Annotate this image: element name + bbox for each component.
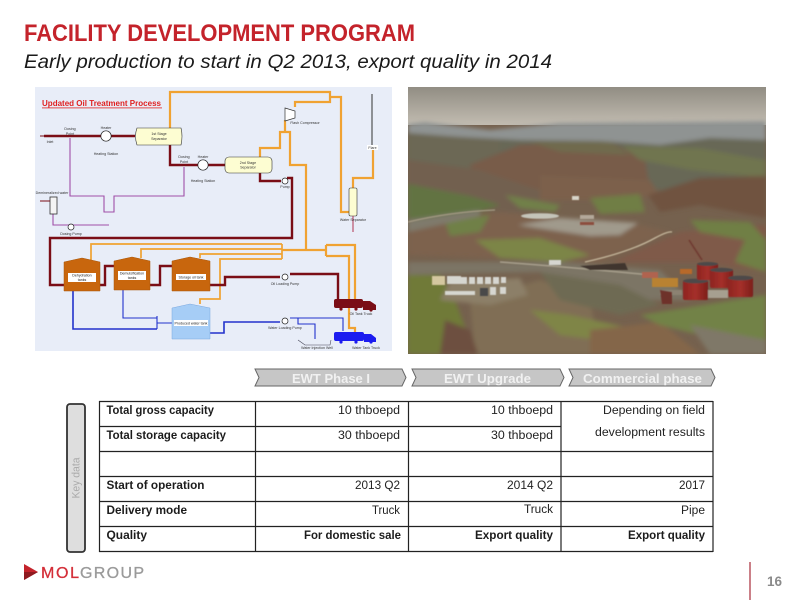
panel: site photograph bbox=[408, 87, 766, 354]
logo: MOL Group: GROUP bbox=[80, 565, 144, 582]
diagram labels: Inlet bbox=[47, 140, 53, 144]
diagram labels: Separator bbox=[240, 166, 257, 170]
gas pipework bbox=[91, 92, 373, 333]
diagram labels: 1st Stage bbox=[151, 132, 167, 136]
diagram labels: Heater bbox=[198, 155, 209, 159]
row: start of operation: 2013 Q2 bbox=[355, 480, 400, 492]
diagram labels: Dosing Pump bbox=[60, 232, 82, 236]
diagram labels: Separator bbox=[151, 137, 168, 141]
row: delivery mode bbox=[106, 504, 705, 517]
storage tanks: Dehydration bbox=[72, 274, 92, 278]
diagram labels: Heating Station bbox=[191, 179, 215, 183]
diagram labels: Flare bbox=[368, 146, 377, 150]
row: total storage capacity: Total storage capacity bbox=[106, 430, 227, 442]
phase chevron: EWT Phase I: EWT Phase I bbox=[292, 371, 370, 386]
row: quality: Export quality bbox=[475, 530, 554, 542]
diagram labels: Demineralized water bbox=[36, 191, 69, 195]
title: FACILITY DEVELOPMENT PROGRAM bbox=[24, 20, 415, 47]
diagram labels: Point bbox=[66, 132, 74, 136]
diagram labels: Point bbox=[180, 160, 188, 164]
logo: MOL Group bbox=[24, 564, 144, 582]
oil tank truck bbox=[334, 299, 376, 312]
diagram labels: Water Tank Truck bbox=[352, 346, 380, 350]
diagram labels bbox=[36, 121, 380, 350]
diagram labels: Flash Compressor bbox=[290, 121, 320, 125]
chemical dosing lines bbox=[53, 138, 184, 225]
storage tanks: Produced water tank bbox=[175, 322, 208, 326]
key data side label bbox=[67, 404, 85, 552]
page number divider and number bbox=[749, 562, 782, 600]
phase chevron: Commercial phase: Commercial phase bbox=[583, 371, 702, 386]
row: total gross capacity: Depending on field bbox=[603, 405, 705, 417]
separators and column bbox=[40, 128, 357, 232]
row: delivery mode: Pipe bbox=[681, 505, 705, 517]
phase chevron: Commercial phase bbox=[569, 369, 715, 386]
row: start of operation: Start of operation bbox=[106, 480, 204, 492]
row: total gross capacity: 10 thboepd bbox=[338, 405, 400, 417]
table grid bbox=[99, 401, 713, 552]
subtitle: Early production to start in Q2 2013, export quality in 2014 bbox=[24, 52, 552, 73]
row: delivery mode: Truck bbox=[524, 504, 553, 516]
storage tanks: tanks bbox=[78, 278, 86, 282]
row: start of operation bbox=[106, 480, 705, 492]
water pipework bbox=[73, 290, 343, 345]
diagram labels: Oil Tank Truck bbox=[350, 312, 373, 316]
row: quality bbox=[106, 530, 706, 542]
row: delivery mode: Delivery mode bbox=[106, 505, 187, 517]
water tank truck bbox=[334, 332, 376, 344]
panel: oil treatment process diagram bbox=[35, 87, 392, 351]
heaters, pumps and compressor bbox=[40, 108, 295, 324]
diagram labels: Dosing bbox=[64, 127, 76, 131]
diagram labels: Pump bbox=[280, 185, 290, 189]
storage tanks: Demulsification bbox=[120, 272, 144, 276]
row: delivery mode: Truck bbox=[372, 505, 400, 517]
row: quality: Export quality bbox=[628, 530, 706, 542]
row: total gross capacity: Total gross capacity bbox=[106, 405, 215, 417]
diagram labels: Water Injection Well bbox=[301, 346, 333, 350]
diagram labels: Dosing bbox=[178, 155, 190, 159]
storage tanks: Storage oil tank bbox=[179, 276, 204, 280]
row: total storage capacity bbox=[106, 427, 705, 442]
diagram labels: Oil Loading Pump bbox=[271, 282, 299, 286]
diagram labels: Water Loading Pump bbox=[268, 326, 302, 330]
key data table bbox=[99, 401, 713, 552]
diagram labels: 2nd Stage bbox=[240, 161, 256, 165]
logo: MOL Group: MOL bbox=[41, 565, 79, 582]
flare stack line bbox=[371, 94, 373, 146]
row: total gross capacity: 10 thboepd bbox=[491, 405, 553, 417]
row: total storage capacity: 30 thboepd bbox=[338, 430, 400, 442]
row: start of operation: 2017 bbox=[679, 480, 705, 492]
row: start of operation: 2014 Q2 bbox=[507, 480, 553, 492]
phase chevron: EWT Upgrade bbox=[412, 369, 564, 386]
key data side label: Key data bbox=[70, 457, 82, 498]
storage tanks: tanks bbox=[128, 276, 136, 280]
diagram labels: Heater bbox=[101, 126, 112, 130]
diagram labels: Water Separator bbox=[340, 218, 367, 222]
diagram labels: Heating Station bbox=[94, 152, 118, 156]
row: total gross capacity bbox=[106, 405, 705, 417]
phase chevron: EWT Phase I bbox=[255, 369, 406, 386]
row: quality: Quality bbox=[106, 530, 148, 542]
crude oil pipework bbox=[44, 136, 338, 300]
diagram heading: Updated Oil Treatment Process bbox=[42, 99, 162, 108]
phase chevron: EWT Upgrade: EWT Upgrade bbox=[444, 371, 531, 386]
row: total storage capacity: development results bbox=[595, 427, 705, 439]
page number divider and number: 16 bbox=[767, 573, 782, 589]
row: total storage capacity: 30 thboepd bbox=[491, 430, 553, 442]
storage tanks bbox=[64, 257, 210, 339]
row: quality: For domestic sale bbox=[304, 530, 401, 542]
